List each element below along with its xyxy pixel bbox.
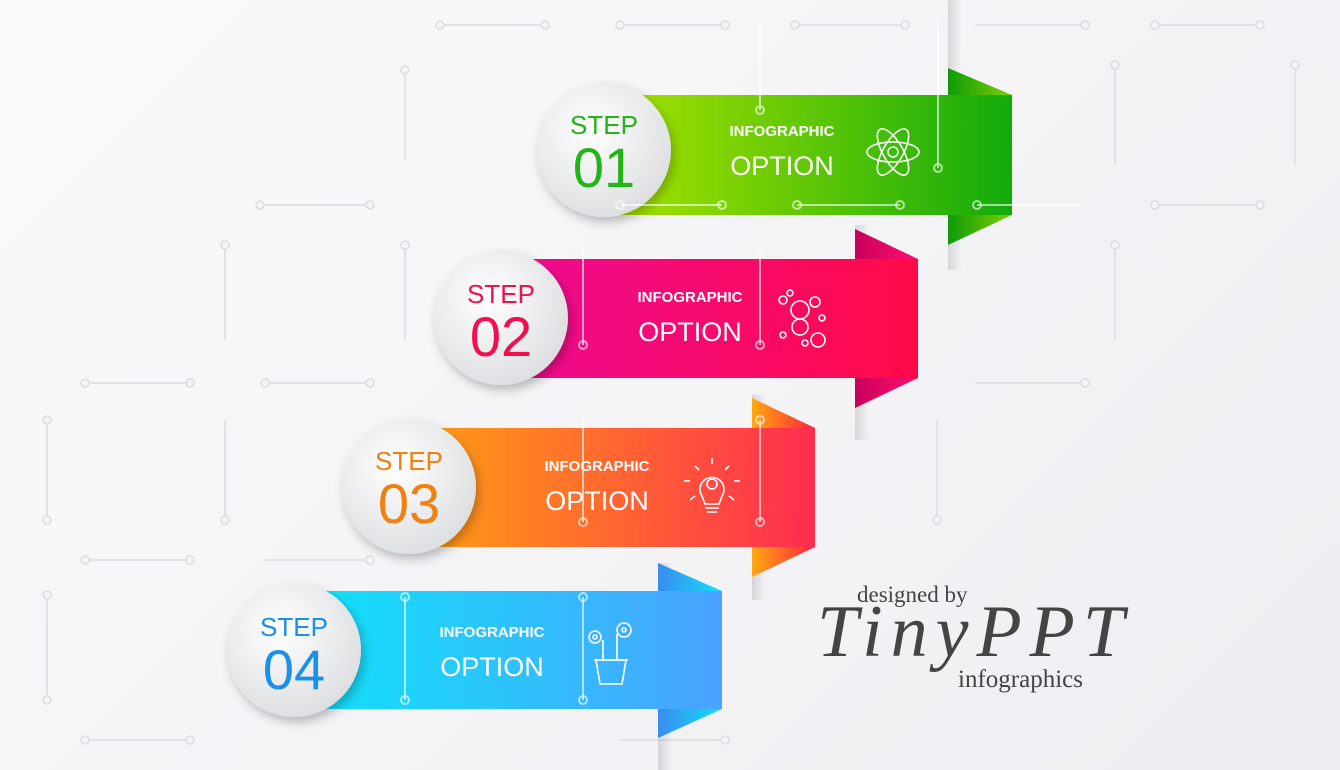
step 3 label: 03 bbox=[378, 472, 440, 535]
step 1 label bbox=[570, 110, 638, 199]
step 4 label: STEP bbox=[260, 612, 328, 642]
step 2 text: OPTION bbox=[638, 317, 742, 347]
step 3 text: OPTION bbox=[545, 486, 649, 516]
step 3 label: STEP bbox=[375, 446, 443, 476]
icon: bubbles bbox=[779, 290, 825, 347]
icon: atom bbox=[867, 124, 919, 180]
step 2 bbox=[434, 225, 918, 440]
step 3 text bbox=[544, 458, 650, 516]
step 1 label: 01 bbox=[573, 136, 635, 199]
step 4 label bbox=[260, 612, 328, 701]
icon: flower pot bbox=[589, 623, 631, 684]
step 2 text: INFOGRAPHIC bbox=[638, 289, 742, 306]
logo: designed by TinyPPT infographics: infographics bbox=[958, 666, 1083, 693]
step 2 label bbox=[467, 279, 535, 368]
step 3 label bbox=[375, 446, 443, 535]
step 1 text: INFOGRAPHIC bbox=[730, 123, 834, 140]
step 1 label: STEP bbox=[570, 110, 638, 140]
step 4 text bbox=[440, 624, 544, 682]
step 1 text bbox=[730, 123, 834, 181]
step 2 label: 02 bbox=[470, 305, 532, 368]
logo: designed by TinyPPT infographics: TinyPPT bbox=[817, 591, 1132, 673]
step 3 text: INFOGRAPHIC bbox=[544, 458, 650, 475]
overlay circuit lines on ribbons bbox=[401, 20, 1080, 704]
step 2 text bbox=[638, 289, 742, 347]
step 3 bbox=[342, 395, 815, 600]
step 4 text: INFOGRAPHIC bbox=[440, 624, 544, 641]
step 4 label: 04 bbox=[263, 638, 325, 701]
step 4 bbox=[227, 563, 722, 770]
step 1 text: OPTION bbox=[730, 151, 834, 181]
step 2 label: STEP bbox=[467, 279, 535, 309]
step 1 bbox=[537, 0, 1012, 270]
logo: designed by TinyPPT infographics: designed by bbox=[857, 582, 968, 607]
step 4 text: OPTION bbox=[440, 652, 544, 682]
icon: lightbulb bbox=[684, 458, 740, 512]
